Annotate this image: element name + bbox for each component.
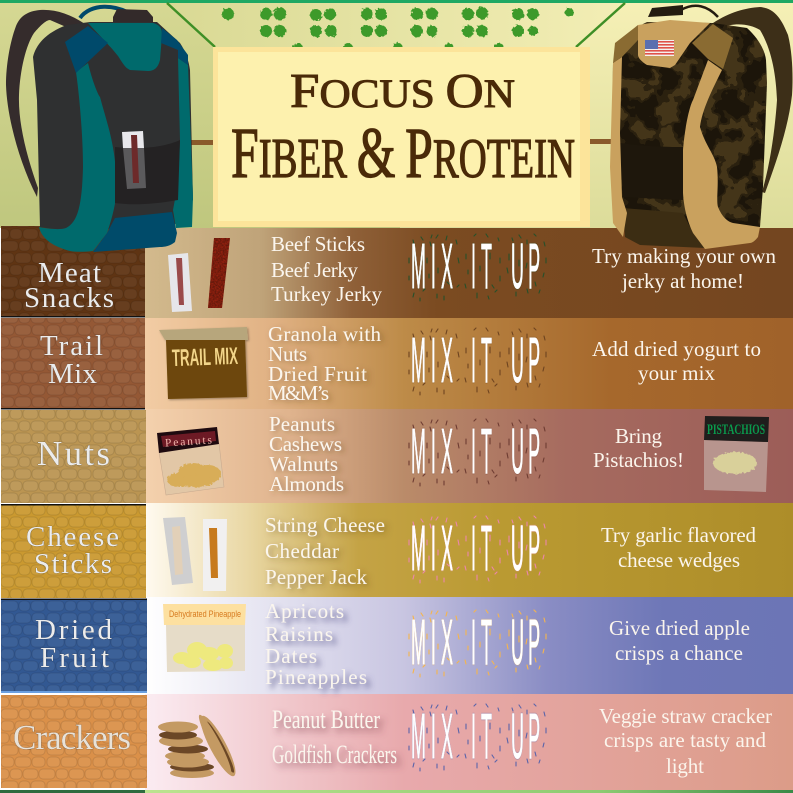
label: dried fruit (35, 614, 112, 674)
list: cheese sticks: Pepper Jack (265, 565, 368, 589)
label: cheese sticks: Cheese (26, 521, 119, 553)
icon: string cheese packs (163, 517, 227, 591)
list: dried fruit: Raisins (265, 622, 333, 646)
icon: camo backpack (610, 5, 793, 250)
icon: trail mix box (159, 327, 248, 399)
tip: meat snacks: jerky at home! (621, 269, 744, 293)
label: nuts: Nuts (37, 434, 110, 473)
list: trail mix (268, 322, 382, 405)
tip: dried fruit: Give dried apple (609, 616, 750, 640)
list: crackers: Goldfish Crackers (272, 740, 397, 769)
tip: meat snacks (592, 244, 776, 293)
list: nuts: Cashews (269, 432, 342, 456)
label: dried fruit: Dried (35, 614, 112, 646)
tip: trail mix: Add dried yogurt to (592, 337, 761, 361)
tip: dried fruit (609, 616, 750, 665)
label: trail mix (40, 330, 103, 390)
label: meat snacks (24, 257, 114, 314)
header scene background (0, 0, 793, 228)
list: cheese sticks: String Cheese (265, 513, 385, 537)
icon: beef stick and jerky (168, 236, 233, 312)
panel: dried fruit label (1, 598, 147, 693)
list: meat snacks (271, 232, 382, 306)
list: nuts: Walnuts (269, 452, 338, 476)
label: trail mix: Trail (40, 330, 103, 362)
ceiling leaf pattern (222, 7, 574, 53)
label: meat snacks: Meat (38, 257, 101, 289)
list: trail mix: Dried Fruit (268, 362, 367, 386)
list: dried fruit: Apricots (265, 599, 344, 623)
list: nuts: Almonds (269, 472, 344, 496)
label: trail mix: Mix (48, 358, 98, 390)
tip: cheese sticks: cheese wedges (618, 548, 740, 572)
tip: meat snacks: Try making your own (592, 244, 776, 268)
list: dried fruit: Dates (265, 644, 317, 668)
icon: beef stick in pocket (122, 131, 146, 189)
list: nuts: Peanuts (269, 412, 335, 436)
tip: crackers: light (666, 754, 704, 778)
panel: nuts label (1, 410, 146, 503)
list: meat snacks: Turkey Jerky (271, 282, 382, 306)
list: trail mix: Nuts (268, 342, 307, 366)
connector bars (188, 139, 613, 145)
mix it up: nuts: MIX IT UP (411, 414, 540, 487)
label: crackers: Crackers (13, 718, 131, 757)
title panel (213, 47, 590, 227)
panel: crackers label (1, 695, 147, 788)
icon: trail mix box: TRAIL MIX (171, 343, 238, 372)
label: meat snacks: Snacks (24, 282, 114, 314)
panel: trail mix label (1, 318, 145, 410)
panel: cheese sticks label (1, 504, 146, 598)
title: focus on: FOCUS ON (290, 63, 515, 118)
tip: cheese sticks (601, 523, 756, 572)
list: trail mix: M&M’s (268, 381, 329, 405)
tip: trail mix (592, 337, 761, 385)
tip: crackers: crisps are tasty and (604, 728, 766, 752)
icon: peanuts bag (157, 427, 224, 495)
icon: pistachios bag (704, 416, 769, 492)
list: dried fruit (265, 599, 367, 689)
tip: nuts: Bring (615, 424, 662, 448)
list: dried fruit: Pineapples (265, 665, 367, 689)
mix it up: cheese sticks: MIX IT UP (411, 511, 540, 584)
panel: meat snacks label (1, 226, 145, 318)
icon: american flag (645, 40, 674, 56)
mix it up: trail mix: MIX IT UP (411, 323, 540, 396)
tip: dried fruit: crisps a chance (615, 641, 743, 665)
icon: teal backpack (6, 7, 193, 252)
list: trail mix: Granola with (268, 322, 382, 346)
list: cheese sticks: Cheddar (265, 539, 339, 563)
list: cheese sticks (265, 513, 385, 589)
label: cheese sticks: Sticks (34, 548, 112, 580)
icon: cracker stack (158, 712, 241, 780)
list: meat snacks: Beef Jerky (271, 258, 358, 282)
label: dried fruit: Fruit (40, 642, 109, 674)
list: crackers: Peanut Butter (272, 705, 380, 734)
tip: trail mix: your mix (638, 361, 716, 385)
tip: cheese sticks: Try garlic flavored (601, 523, 756, 547)
mix it up: meat snacks: MIX IT UP (411, 229, 540, 302)
list: crackers (272, 705, 397, 769)
label: cheese sticks (26, 521, 119, 580)
icon: peanuts bag: Peanuts (165, 434, 213, 450)
icon: dehydrated pineapple bag: Dehydrated Pineapple (169, 609, 241, 619)
icon: dehydrated pineapple bag (163, 604, 246, 672)
title: fiber and protein: FIBER & PROTEIN (231, 113, 575, 193)
row backgrounds (0, 228, 793, 793)
tip: nuts (593, 424, 684, 472)
list: nuts (269, 412, 344, 496)
mix it up: dried fruit: MIX IT UP (411, 605, 540, 678)
tip: crackers (599, 704, 772, 778)
tip: crackers: Veggie straw cracker (599, 704, 772, 728)
mix it up: crackers: MIX IT UP (411, 699, 540, 772)
tip: nuts: Pistachios! (593, 448, 684, 472)
list: meat snacks: Beef Sticks (271, 232, 365, 256)
